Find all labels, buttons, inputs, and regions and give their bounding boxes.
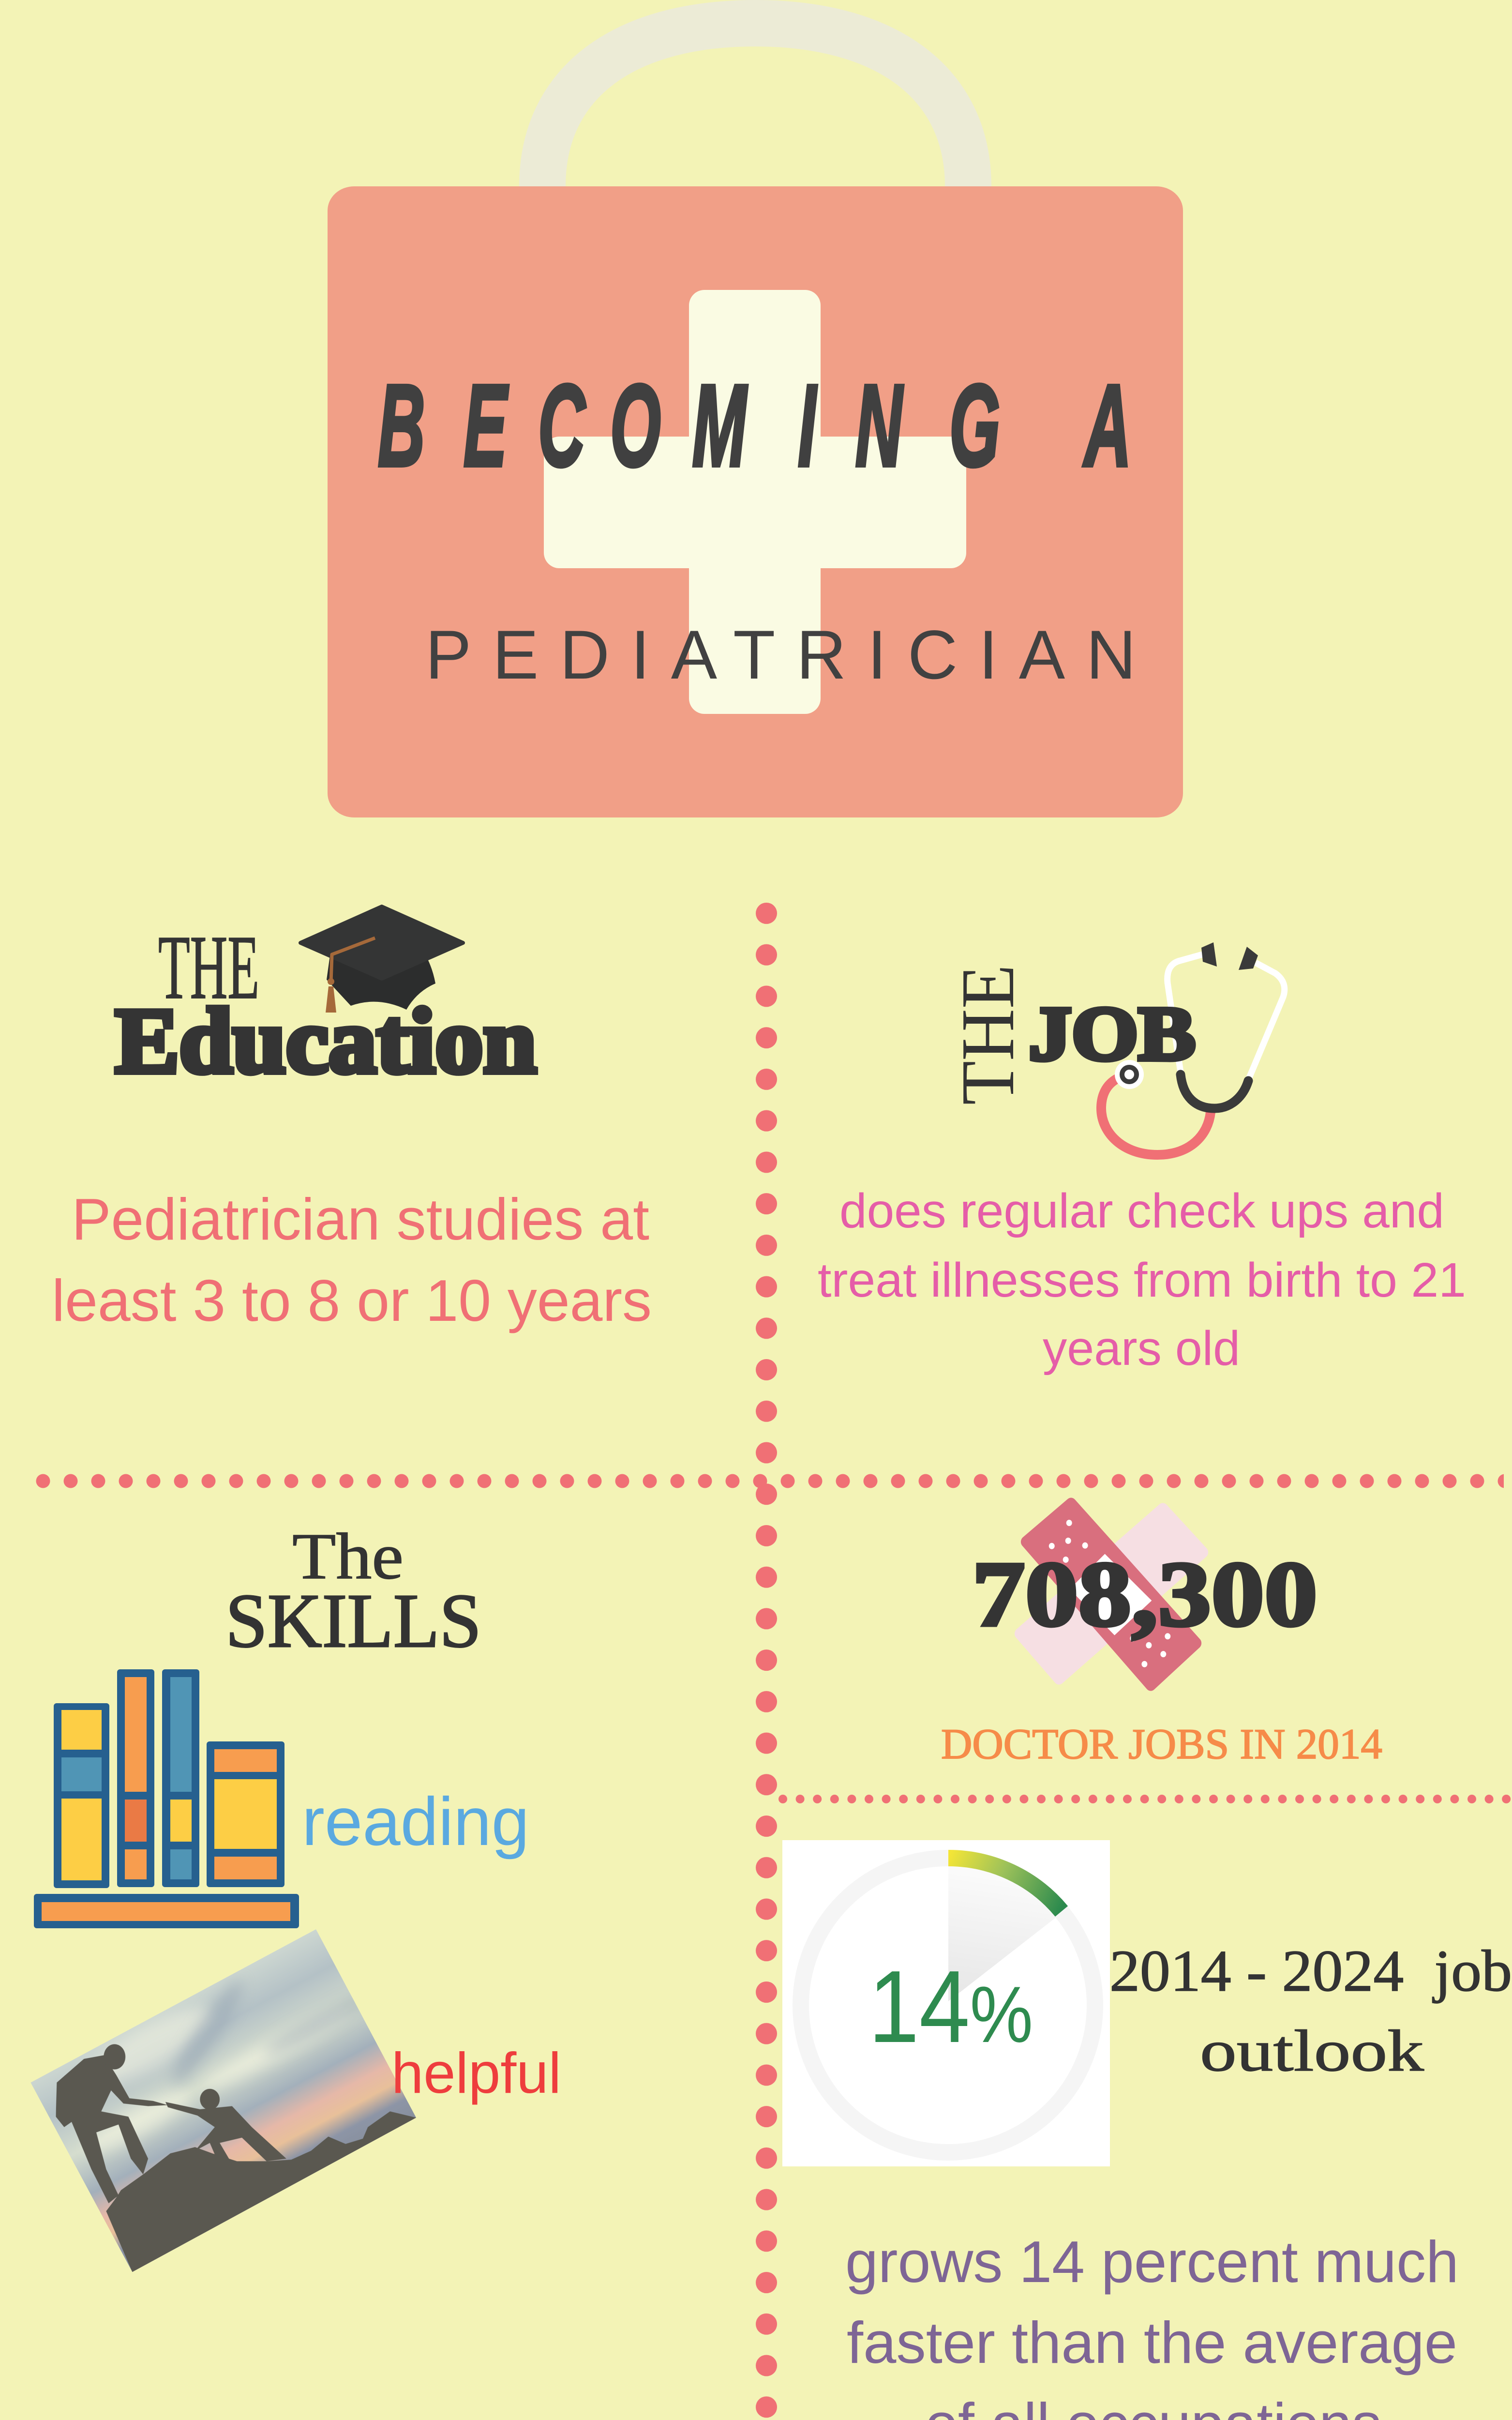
heading: job outlook range: 2014 - 2024 job [1109, 1938, 1512, 2004]
heading: the rotated: THE [945, 965, 1030, 1105]
heading: job outlook range [1109, 1938, 1512, 2084]
icon: crossed bandages [1020, 1503, 1203, 1685]
panel: doctor jobs count [941, 1503, 1382, 1768]
text: outlook body: grows 14 percent much [845, 2229, 1459, 2295]
text: job body: treat illnesses from birth to 21 [818, 1253, 1466, 1307]
heading: the: The [292, 1520, 404, 1593]
panel: the skills [30, 1520, 561, 2272]
heading: job: JOB [1029, 991, 1196, 1076]
heading: the: THE [158, 917, 259, 1018]
label: doctor jobs in 2014: DOCTOR JOBS IN 2014 [941, 1721, 1382, 1768]
panel: the job [818, 942, 1466, 1376]
text: education body [52, 1186, 652, 1333]
icon: stethoscope [1101, 942, 1285, 1155]
panel: education [52, 907, 652, 1333]
text: job body: years old [1043, 1321, 1240, 1376]
text: education body: Pediatrician studies at [72, 1186, 649, 1252]
title: becoming a: BECOMING A [378, 361, 1131, 491]
heading: education: Education [115, 989, 537, 1092]
text: job body: does regular check ups and [839, 1184, 1444, 1238]
heading: job outlook range: outlook [1200, 2018, 1424, 2084]
heading: skills: SKILLS [225, 1578, 481, 1664]
label: reading: reading [302, 1783, 529, 1860]
icon: graduation cap [300, 907, 463, 1013]
chart: 14 percent donut [782, 1840, 1110, 2166]
text: outlook body: faster than the average [847, 2310, 1457, 2375]
text: job body [818, 1184, 1466, 1376]
panel: job outlook [782, 1840, 1512, 2420]
text: education body: least 3 to 8 or 10 years [52, 1268, 652, 1333]
icon: medical cross [544, 290, 966, 714]
icon: bag body [328, 186, 1183, 817]
subtitle: pediatrician: PEDIATRICIAN [425, 617, 1136, 694]
stat: 708,300: 708,300 [972, 1543, 1317, 1646]
photo: climbers helping each other [30, 1929, 416, 2272]
stat: 14%: 14% [868, 1949, 1033, 2064]
panel: title medical bag [328, 23, 1183, 817]
icon: bag handle [542, 23, 968, 186]
label: helpful: helpful [391, 2041, 561, 2105]
icon: books on shelf [34, 1669, 299, 1928]
text: outlook body [845, 2229, 1459, 2420]
